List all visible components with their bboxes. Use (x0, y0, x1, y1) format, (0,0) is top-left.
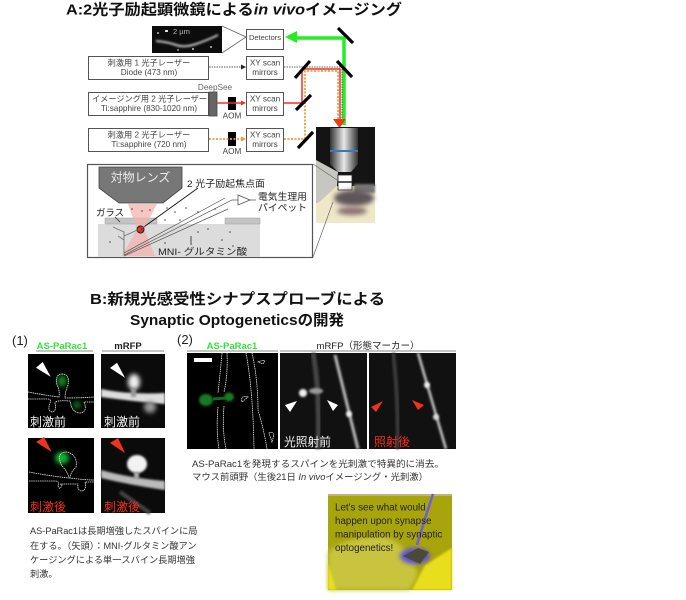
microscope optical diagram (88, 26, 375, 258)
AOM modulators: AOM (223, 112, 242, 120)
pipette (124, 195, 256, 256)
pipette label (258, 191, 307, 214)
detectors box (246, 30, 284, 50)
objective lens (99, 167, 182, 203)
stimulation laser 2 box (88, 128, 208, 152)
neuron dendrite (113, 226, 146, 255)
XY scan mirrors 1 (246, 56, 284, 80)
after: mRFP: 刺激後 (104, 499, 140, 514)
imaging laser box: DeepSee (198, 83, 233, 92)
photo: mouse with optical fiber: happen upon synapse (335, 516, 432, 527)
caption (2): マウス前頭野（生後21日 In vivoイメージング・光刺激） (192, 471, 428, 482)
glass plates (105, 218, 260, 224)
pipette label: パイペット (258, 203, 307, 214)
orange stimulation dotted beam (209, 71, 338, 142)
MNI glutamate label: MNI- グルタミン酸 (158, 246, 248, 258)
XY scan mirrors 3 (246, 128, 284, 152)
XY scan mirrors 2: XY scan (250, 94, 281, 104)
zoom lines to photo (313, 164, 337, 257)
XY scan mirrors 2 (246, 92, 284, 116)
green detection beam arrow (285, 31, 344, 125)
title A: A:2光子励起顕微鏡による in vivo イメージング (66, 0, 402, 18)
red imaging beam arrow (217, 69, 346, 128)
caption (1): ケージングによる単一スパイン長期増強 (30, 554, 195, 565)
panel (2) (177, 332, 456, 482)
AOM modulators (223, 97, 242, 156)
stimulation laser 1 box (88, 56, 208, 80)
imaging laser box: Ti:sapphire (830-1020 nm) (101, 104, 197, 113)
before: mRFP (101, 354, 165, 429)
photo: objective over mouse (316, 127, 375, 223)
caption (1) (30, 525, 197, 579)
label (1): (1) (12, 333, 28, 348)
mirrors (295, 28, 353, 148)
brain tissue (98, 224, 260, 257)
title B: B:新規光感受性シナプスプローブによる (90, 290, 385, 308)
after: AS-PaRac1 (28, 437, 94, 514)
column headers: AS-PaRac1 (207, 341, 258, 352)
XY scan mirrors 1: XY scan (250, 58, 281, 68)
caption (1): 在する。（矢頭）：MNI-グルタミン酸アン (30, 540, 197, 551)
mRFP after image (369, 353, 456, 449)
MNI glutamate label (158, 236, 248, 258)
caption (2) (192, 458, 444, 482)
imaging laser box (88, 83, 233, 116)
pipette label: 電気生理用 (258, 191, 307, 203)
column headers: AS-PaRac1 (37, 341, 88, 352)
focal plane label and line (141, 178, 265, 229)
caption (2): AS-PaRac1を発現するスパインを光刺激で特異的に消去。 (192, 458, 444, 469)
focal plane label and line: 2 光子励起焦点面 (187, 178, 265, 190)
XY scan mirrors 3: XY scan (250, 130, 281, 140)
title B: Synaptic Optogeneticsの開発 (130, 311, 344, 329)
stimulation laser 1 box: Diode (473 nm) (121, 68, 177, 77)
caption (1): 刺激。 (30, 568, 58, 579)
detail panel: two-photon uncaging (88, 164, 312, 258)
spine image inset (152, 26, 222, 53)
imaging laser box: イメージング用 2 光子レーザー (92, 94, 207, 104)
photo: mouse with optical fiber (328, 494, 452, 590)
photo: mouse with optical fiber: optogenetics! (335, 543, 393, 554)
after: AS-PaRac1: 刺激後 (30, 499, 66, 514)
glass label: ガラス (96, 208, 124, 219)
before: AS-PaRac1 (28, 354, 94, 429)
before: mRFP: 刺激前 (104, 414, 140, 429)
stimulation laser 1 box: 刺激用 1 光子レーザー (108, 58, 190, 68)
mRFP before image: 光照射前 (284, 434, 331, 449)
photo: mouse with optical fiber: Let's see what would (335, 502, 426, 514)
objective lens: 対物レンズ (111, 170, 170, 184)
after: mRFP (101, 438, 165, 514)
excitation light cone (122, 204, 157, 256)
focal spot (137, 226, 144, 233)
XY scan mirrors 3: mirrors (252, 140, 278, 149)
stimulation laser 2 box: Ti:sapphire (720 nm) (111, 140, 187, 149)
column headers: mRFP (114, 341, 142, 352)
inset callout lines (222, 26, 246, 53)
mRFP after image: 照射後 (374, 434, 410, 449)
photo: mouse with optical fiber: manipulation by synaptic (335, 530, 442, 540)
title B (90, 290, 385, 329)
caption (1): AS-PaRac1は長期増強したスパインに局 (30, 525, 197, 536)
blue excitation dotted beam (209, 64, 342, 120)
AOM modulators: AOM (223, 147, 242, 156)
column headers (36, 341, 164, 352)
column headers: mRFP（形態マーカー） (317, 340, 419, 352)
before: AS-PaRac1: 刺激前 (30, 414, 66, 429)
stimulation laser 2 box: 刺激用 2 光子レーザー (108, 130, 190, 140)
glutamate dots (109, 207, 234, 247)
scale bar (194, 358, 212, 362)
mRFP before image (280, 353, 367, 449)
label (2): (2) (177, 332, 193, 347)
detectors box: Detectors (249, 33, 281, 42)
panel (1) (12, 333, 197, 579)
XY scan mirrors 2: mirrors (252, 104, 278, 113)
XY scan mirrors 1: mirrors (252, 68, 278, 77)
spine image inset: 2 µm (173, 27, 190, 36)
AS-PaRac1 image (187, 353, 278, 449)
column headers (187, 340, 456, 352)
